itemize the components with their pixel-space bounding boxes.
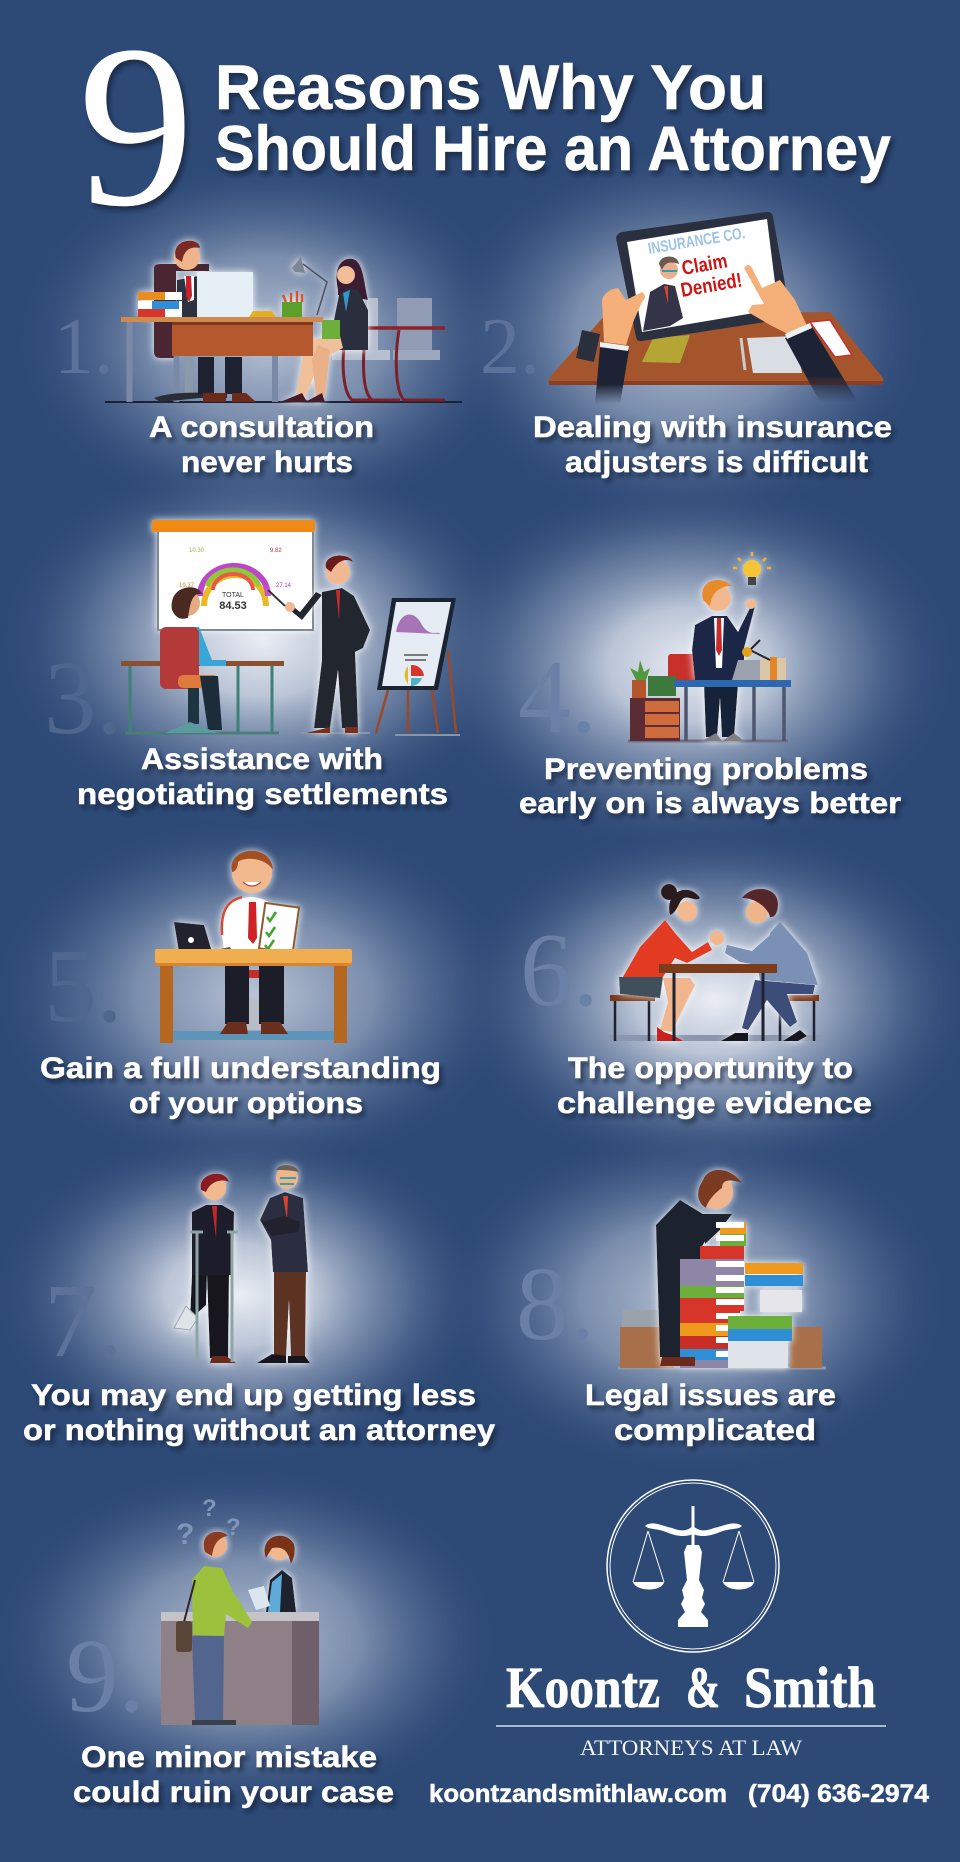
caption 7: You may end up getting less bbox=[31, 1379, 476, 1412]
caption 2: Dealing with insurance bbox=[533, 411, 892, 444]
caption 9: One minor mistake bbox=[81, 1741, 377, 1774]
firm name bbox=[506, 1655, 876, 1720]
caption 7 bbox=[23, 1379, 495, 1447]
illustration: presentation: 9.82 bbox=[270, 548, 282, 554]
panel: firm logo and contact bbox=[429, 1480, 929, 1808]
illustration: presentation: TOTAL bbox=[222, 592, 244, 599]
illustration: arm wrestling bbox=[607, 884, 822, 1041]
arms bbox=[595, 347, 629, 404]
illustration: tablet claim denied: INSURANCE CO. bbox=[647, 225, 746, 258]
caption 2: adjusters is difficult bbox=[565, 446, 868, 479]
caption 3 bbox=[77, 743, 448, 811]
caption 2 bbox=[533, 411, 892, 479]
firm name: Smith bbox=[744, 1655, 876, 1720]
title numeral 9: 9 bbox=[78, 0, 194, 255]
illustration: presentation: 84.53 bbox=[219, 600, 247, 612]
panel: reason 8 bbox=[516, 1170, 836, 1447]
illustration: presentation: 27.14 bbox=[276, 583, 292, 589]
tablet bbox=[616, 212, 790, 341]
caption 6: The opportunity to bbox=[568, 1052, 853, 1085]
caption 4: Preventing problems bbox=[544, 753, 868, 786]
tagline: ATTORNEYS AT LAW bbox=[580, 1735, 802, 1760]
caption 8: Legal issues are bbox=[585, 1379, 836, 1412]
title text bbox=[215, 53, 891, 184]
contact details bbox=[429, 1780, 929, 1808]
number 5: 5. bbox=[44, 927, 123, 1044]
illustration: client at reception counter: ? bbox=[202, 1495, 217, 1522]
number 2: 2. bbox=[480, 303, 540, 391]
caption 4: early on is always better bbox=[519, 787, 901, 820]
title bbox=[78, 0, 891, 255]
illustration: injured man with lawyer bbox=[174, 1165, 310, 1363]
illustration: tablet claim denied bbox=[549, 212, 883, 404]
desk bbox=[549, 312, 883, 385]
caption 6: challenge evidence bbox=[557, 1087, 872, 1120]
caption 9 bbox=[73, 1741, 394, 1809]
illustration: tablet claim denied: Denied! bbox=[679, 269, 744, 302]
panel: reason 2 bbox=[480, 212, 892, 479]
panel: reason 5 bbox=[40, 851, 441, 1120]
title text: Should Hire an Attorney bbox=[215, 114, 891, 184]
caption 6 bbox=[557, 1052, 872, 1120]
illustration: presentation: 19.37 bbox=[179, 583, 195, 589]
illustration: man at desk with checklist bbox=[155, 851, 352, 1043]
caption 4 bbox=[519, 753, 901, 820]
number 9: 9. bbox=[66, 1617, 145, 1734]
illustration: consultation at desk bbox=[105, 241, 462, 402]
panel: reason 7 bbox=[23, 1165, 495, 1447]
caption 7: or nothing without an attorney bbox=[23, 1414, 495, 1447]
illustration: client at reception counter bbox=[161, 1495, 319, 1725]
title text: Reasons Why You bbox=[215, 53, 766, 123]
number 1: 1. bbox=[54, 303, 114, 391]
illustration: man with piles of binders bbox=[618, 1170, 826, 1368]
firm name: Koontz bbox=[506, 1655, 660, 1720]
illustration: client at reception counter: ? bbox=[176, 1518, 194, 1551]
panel: reason 4 bbox=[518, 552, 901, 820]
illustration: man with bulb idea bbox=[628, 552, 791, 741]
panel: reason 3 bbox=[44, 520, 460, 811]
illustration: client at reception counter: ? bbox=[226, 1514, 241, 1541]
panel: reason 9 bbox=[66, 1495, 394, 1809]
logo: scales of justice bbox=[607, 1480, 779, 1652]
number 4: 4. bbox=[518, 638, 597, 755]
contact details: koontzandsmithlaw.com bbox=[429, 1780, 727, 1808]
illustration: presentation bbox=[121, 520, 460, 735]
caption 5: of your options bbox=[129, 1087, 363, 1120]
panel: reason 6 bbox=[520, 884, 872, 1120]
number 7: 7. bbox=[44, 1262, 123, 1379]
caption 8: complicated bbox=[614, 1414, 816, 1447]
firm name: & bbox=[686, 1655, 720, 1720]
illustration: tablet claim denied: Claim bbox=[680, 250, 729, 280]
caption 9: could ruin your case bbox=[73, 1776, 394, 1809]
crutches bbox=[190, 1232, 238, 1362]
caption 5: Gain a full understanding bbox=[40, 1052, 441, 1085]
caption 1: A consultation bbox=[149, 411, 374, 444]
hands bbox=[602, 288, 645, 345]
caption 8 bbox=[585, 1379, 836, 1447]
number 3: 3. bbox=[44, 639, 123, 756]
caption 3: negotiating settlements bbox=[77, 778, 448, 811]
illustration: presentation: 10.30 bbox=[189, 548, 205, 554]
caption 1 bbox=[149, 411, 374, 479]
caption 1: never hurts bbox=[181, 446, 353, 479]
number 6: 6. bbox=[520, 911, 599, 1028]
caption 5 bbox=[40, 1052, 441, 1120]
panel: reason 1 bbox=[54, 241, 462, 479]
caption 3: Assistance with bbox=[141, 743, 383, 776]
contact details: (704) 636-2974 bbox=[748, 1780, 929, 1808]
number 8: 8. bbox=[516, 1245, 595, 1362]
